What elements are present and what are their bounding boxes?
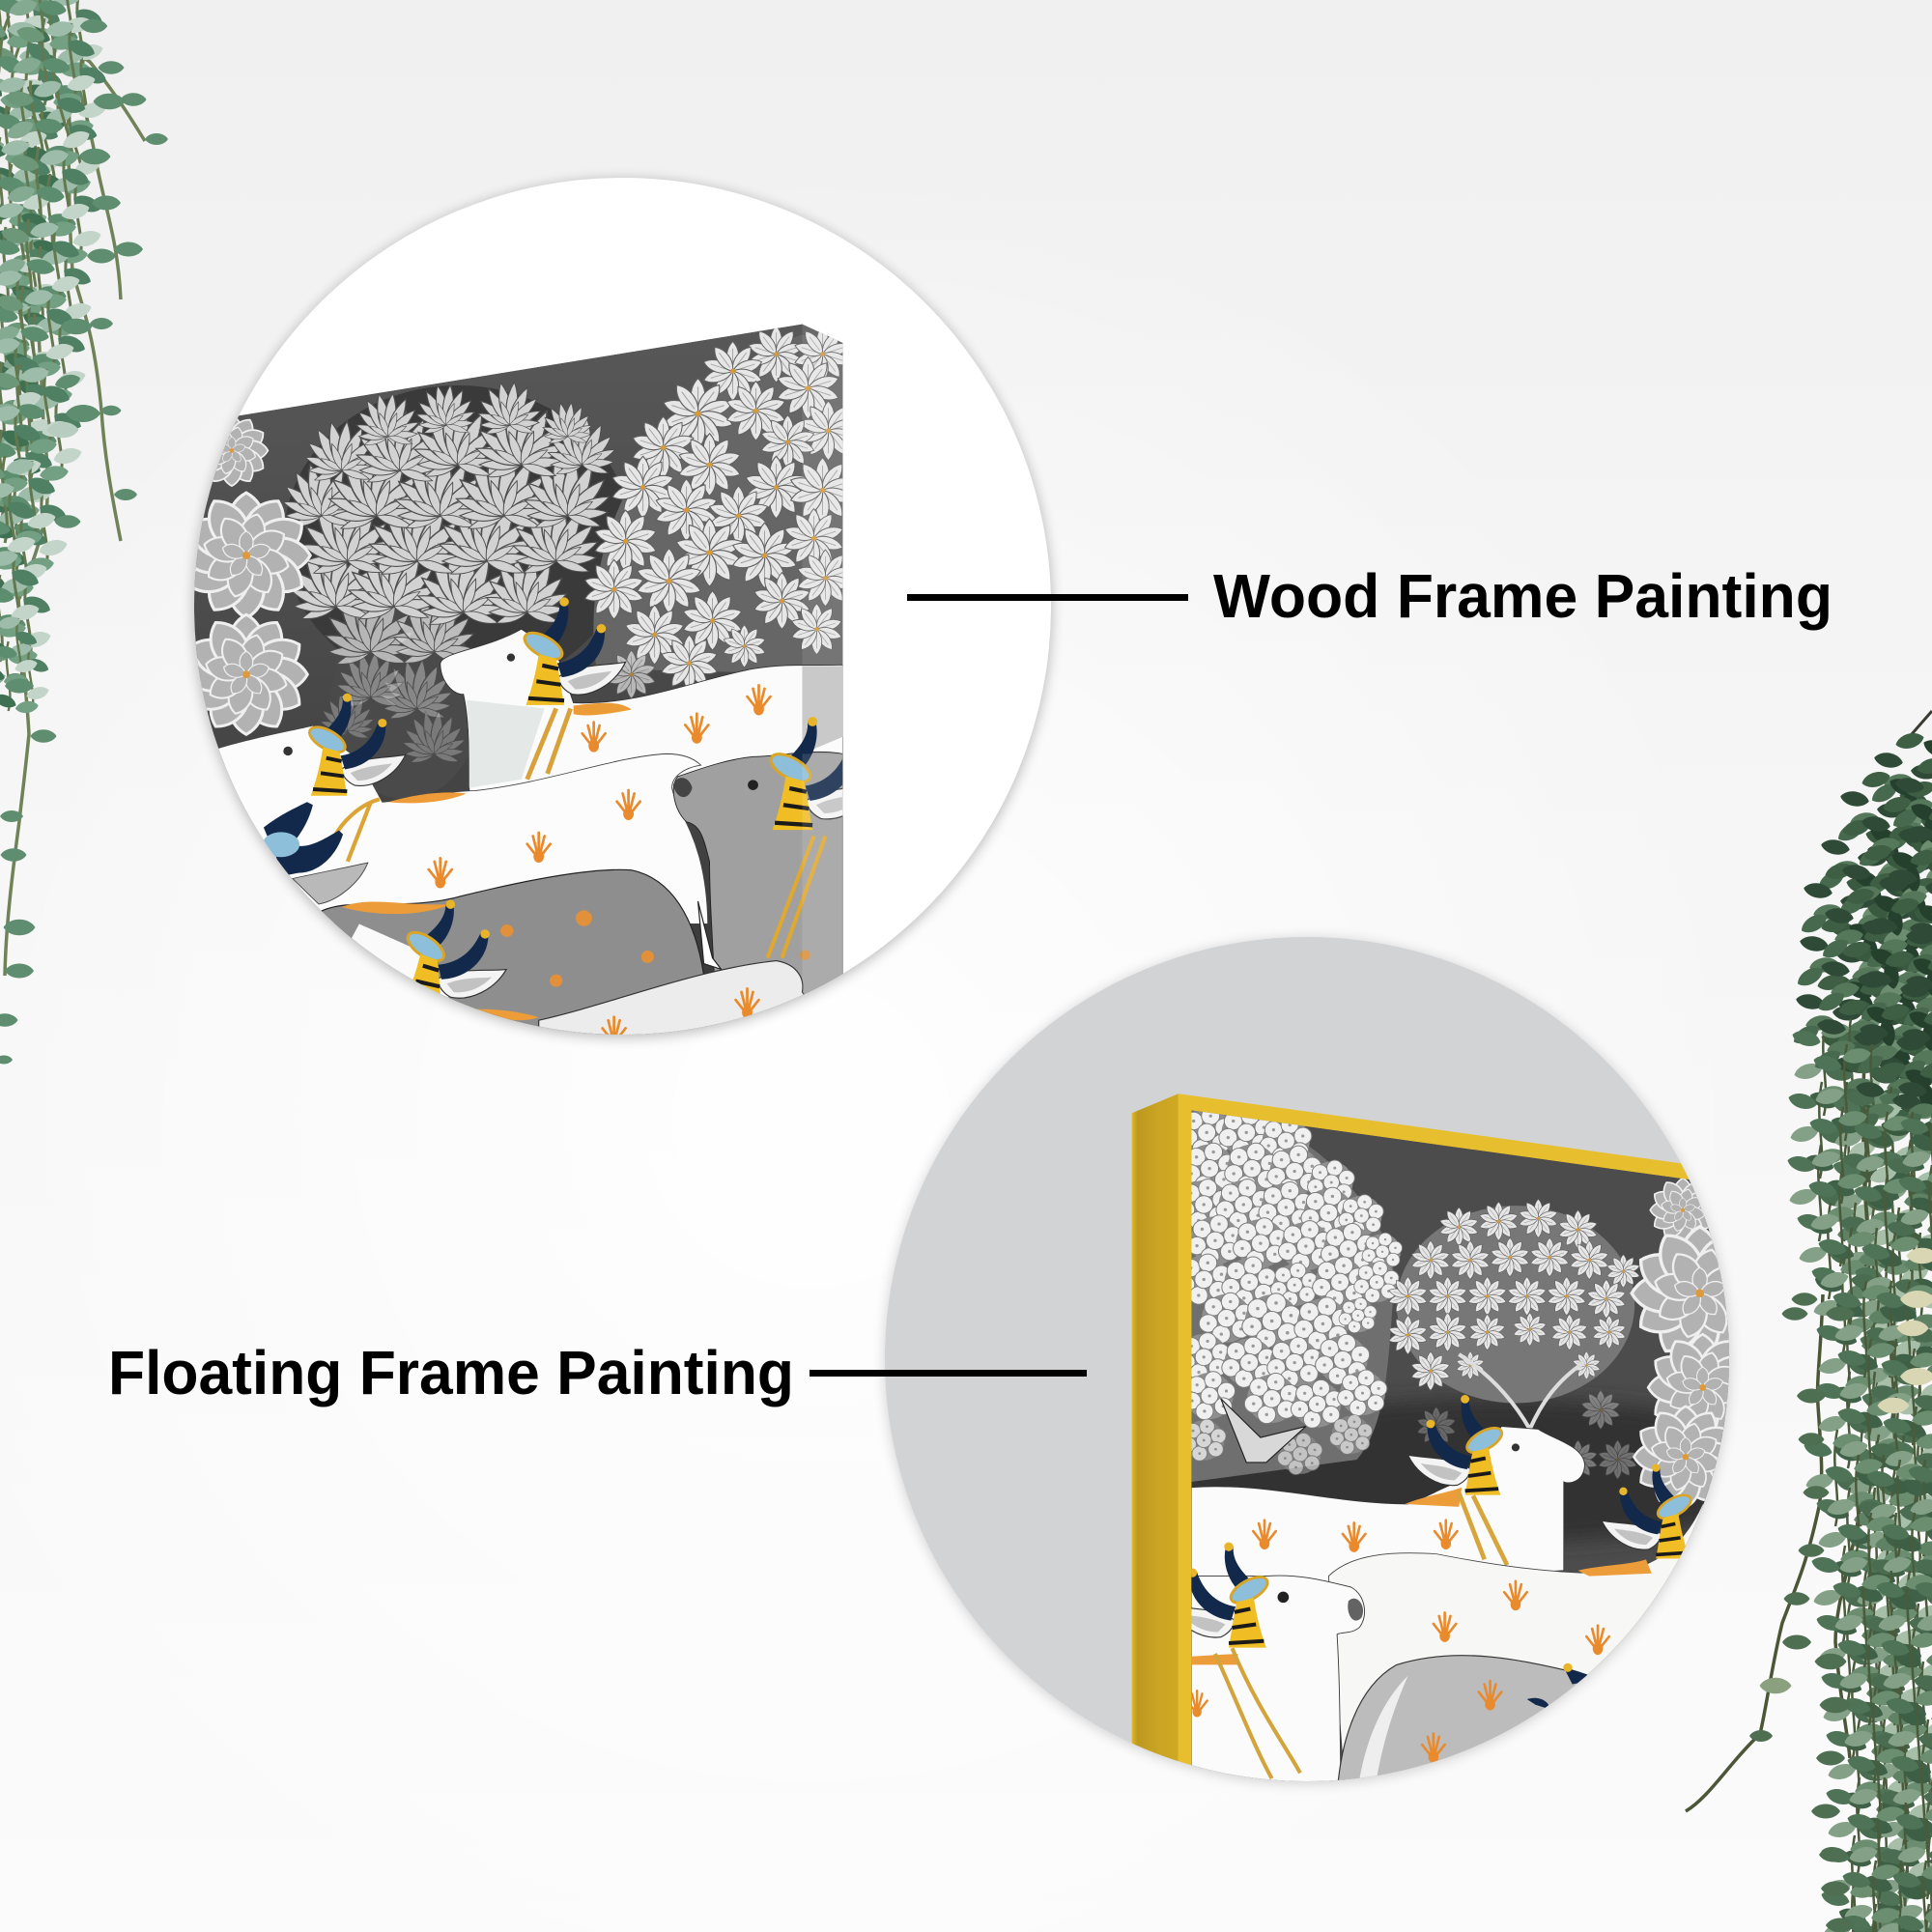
plant: hanging vine right xyxy=(1686,711,1932,1932)
right lotus tree xyxy=(1630,1179,1729,1507)
cow: middle white cow xyxy=(209,694,708,923)
left cluster tree xyxy=(1177,1107,1403,1482)
cow: right white cow body xyxy=(1327,1463,1704,1779)
cow: back white cow xyxy=(440,597,842,805)
painting: wood frame canvas close-up xyxy=(194,325,842,1035)
left lotus tree xyxy=(182,415,311,735)
label: Wood Frame Painting: Wood Frame Painting xyxy=(1213,561,1833,631)
panel: floating frame circle xyxy=(885,937,1810,1797)
cow: grey cow on right xyxy=(672,717,842,1024)
connector line: wood frame xyxy=(907,594,1188,601)
right daisy tree xyxy=(583,326,859,698)
cow: lower front cows xyxy=(352,900,805,1035)
plant: hanging vine top left xyxy=(0,0,168,1065)
cow: back white cow facing right xyxy=(1191,1395,1585,1593)
side wrap of lower canvas xyxy=(802,753,842,995)
middle feather tree xyxy=(284,384,622,762)
frame front edges xyxy=(1179,1094,1690,1766)
cow: grey cow with orange spots xyxy=(321,869,706,1027)
label: Floating Frame Painting: Floating Frame Painting xyxy=(108,1338,794,1407)
painting: floating frame close-up xyxy=(1132,1094,1729,1781)
cow: front white cow facing right xyxy=(1191,1542,1366,1781)
frame side xyxy=(1132,1094,1179,1797)
middle daisy tree xyxy=(1388,1199,1640,1479)
cow: front grey cow xyxy=(1337,1655,1588,1780)
connector line: floating frame xyxy=(810,1370,1087,1377)
panel: wood frame circle xyxy=(174,178,1051,1053)
side wrap of upper canvas xyxy=(802,325,842,668)
